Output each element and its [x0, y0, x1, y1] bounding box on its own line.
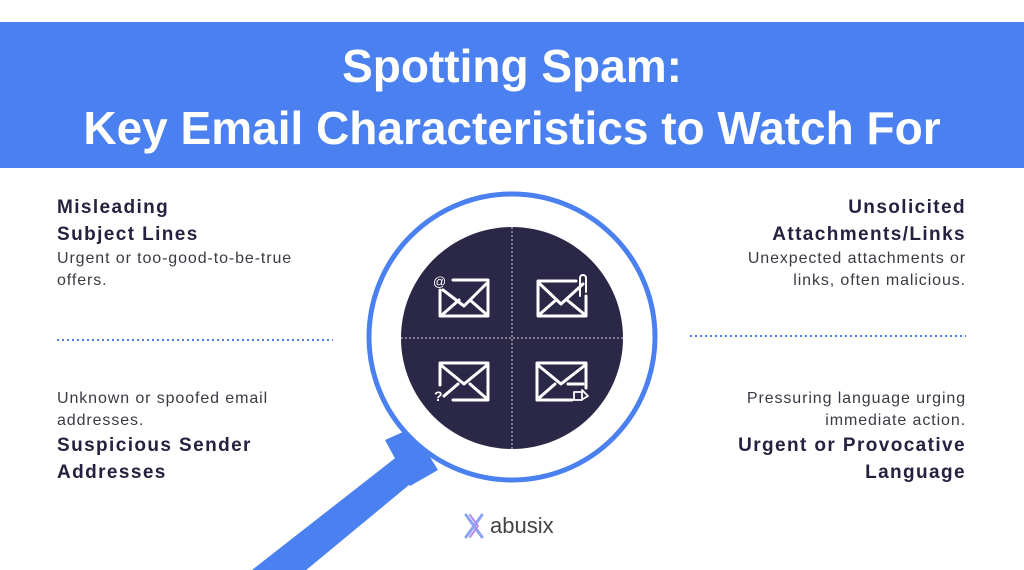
title: Spotting Spam:	[342, 40, 682, 92]
block: urgent language: Pressuring language urging	[747, 390, 966, 407]
dark lens	[401, 227, 623, 449]
logo: abusix	[490, 513, 554, 538]
block: urgent language: Urgent or Provocative	[738, 435, 966, 456]
block: unsolicited attachments: Unexpected attachments or	[748, 250, 966, 267]
icon: envelope alert	[537, 363, 588, 400]
icon: envelope question	[434, 363, 488, 404]
block: suspicious sender	[57, 390, 268, 483]
handle	[252, 428, 438, 570]
block: misleading subject lines	[57, 197, 292, 289]
title: Key Email Characteristics to Watch For	[83, 102, 941, 154]
block: suspicious sender: Unknown or spoofed email	[57, 390, 268, 407]
block: unsolicited attachments	[748, 197, 966, 289]
block: urgent language	[738, 390, 966, 483]
block: urgent language: immediate action.	[825, 412, 966, 429]
title banner	[0, 22, 1024, 168]
title	[83, 40, 941, 154]
block: unsolicited attachments: links, often malicious.	[793, 272, 966, 289]
icon: envelope question: ?	[434, 388, 443, 404]
block: unsolicited attachments: Attachments/Links	[772, 224, 966, 245]
lens ring	[369, 194, 655, 480]
block: suspicious sender: Suspicious Sender	[57, 435, 252, 456]
block: urgent language: Language	[865, 462, 966, 483]
block: suspicious sender: addresses.	[57, 412, 144, 429]
block: unsolicited attachments: Unsolicited	[848, 197, 966, 218]
icon: envelope attachment	[538, 275, 586, 316]
dotted dividers	[57, 339, 333, 341]
icon: envelope @: @	[433, 274, 446, 289]
icon: envelope @	[433, 274, 488, 316]
block: misleading subject lines: Urgent or too-good-to-be-true	[57, 250, 292, 267]
block: misleading subject lines: Subject Lines	[57, 224, 199, 245]
block: suspicious sender: Addresses	[57, 462, 167, 483]
block: misleading subject lines: offers.	[57, 272, 107, 289]
block: misleading subject lines: Misleading	[57, 197, 169, 218]
